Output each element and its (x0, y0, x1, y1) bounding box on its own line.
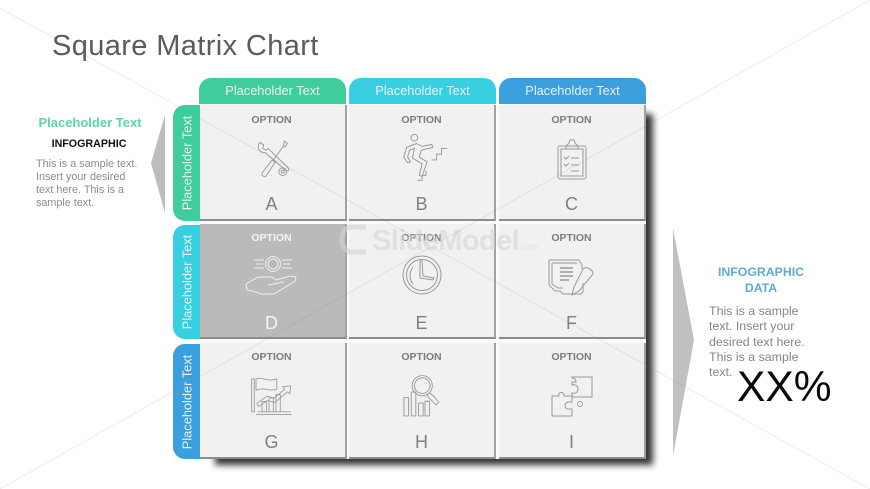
cell B: OPTION (401, 114, 442, 126)
icon: person on stairs (403, 134, 448, 181)
right body text: text. (709, 365, 732, 379)
icon: flag and growth chart (251, 378, 292, 415)
cell D (highlighted): OPTION (251, 232, 292, 244)
cell A: A (265, 194, 278, 214)
header tab: cyan: Placeholder Text (375, 83, 470, 98)
cell D (highlighted) (200, 224, 347, 339)
right body text: desired text here. (709, 335, 805, 349)
header tab: green: Placeholder Text (225, 83, 320, 98)
side tab: cyan (173, 225, 200, 339)
side tab: cyan: Placeholder Text (179, 235, 194, 329)
cell D (highlighted): D (265, 313, 278, 333)
header tab: cyan (349, 78, 496, 104)
cell G: G (264, 432, 278, 452)
left text block (36, 115, 142, 209)
left heading: Placeholder Text (38, 115, 142, 130)
icon: hand with coin (246, 256, 296, 294)
right heading (718, 265, 804, 295)
right body text: This is a sample (709, 304, 799, 318)
cell A: OPTION (251, 114, 292, 126)
cell G (200, 343, 347, 459)
side tab: blue (173, 344, 200, 459)
left body text (36, 158, 137, 209)
right body text: This is a sample (709, 350, 799, 364)
cell I (499, 343, 646, 459)
right heading: INFOGRAPHIC (718, 265, 804, 279)
cell B (349, 105, 496, 221)
cell G: OPTION (251, 351, 292, 363)
cell C: C (565, 194, 578, 214)
arrow: right (673, 228, 694, 456)
cell H: H (415, 432, 428, 452)
cell E: OPTION (401, 232, 442, 244)
icon: magnifier and bars (404, 375, 440, 416)
matrix shadow (215, 114, 653, 465)
icon: clipboard (558, 140, 586, 180)
cell C: OPTION (551, 114, 592, 126)
arrow: left (151, 115, 165, 212)
cell C (499, 105, 646, 221)
cell E (349, 224, 496, 339)
header tab: blue (499, 78, 646, 104)
left body text: This is a sample text. (36, 158, 137, 170)
watermark logo: SlideModel.com (372, 225, 539, 257)
header tab: blue: Placeholder Text (525, 83, 620, 98)
icon: wrench and screwdriver (258, 140, 290, 178)
cell E: E (415, 313, 428, 333)
big percentage: XX% (737, 364, 831, 411)
right heading: DATA (745, 281, 777, 295)
cell B: B (415, 194, 428, 214)
left body text: sample text. (36, 197, 94, 209)
icon: document and pen (548, 260, 594, 296)
left body text: text here. This is a (36, 184, 124, 196)
matrix backing (200, 104, 646, 459)
icon: puzzle pieces (552, 376, 592, 416)
right body text: text. Insert your (709, 319, 794, 333)
header tab: green (199, 78, 346, 104)
cell F: F (566, 313, 577, 333)
side tab: green (173, 105, 200, 221)
left subheading: INFOGRAPHIC (52, 138, 126, 150)
cell F (499, 224, 646, 339)
cell F: OPTION (551, 232, 592, 244)
title: Square Matrix Chart (52, 30, 319, 62)
cell H: OPTION (401, 351, 442, 363)
cell I: OPTION (551, 351, 592, 363)
cell A (200, 105, 347, 221)
icon: clock (402, 256, 442, 294)
side tab: green: Placeholder Text (179, 116, 194, 210)
cell I: I (569, 432, 574, 452)
left body text: Insert your desired (36, 171, 125, 183)
cell H (349, 343, 496, 459)
side tab: blue: Placeholder Text (179, 354, 194, 449)
right body text (709, 304, 805, 379)
